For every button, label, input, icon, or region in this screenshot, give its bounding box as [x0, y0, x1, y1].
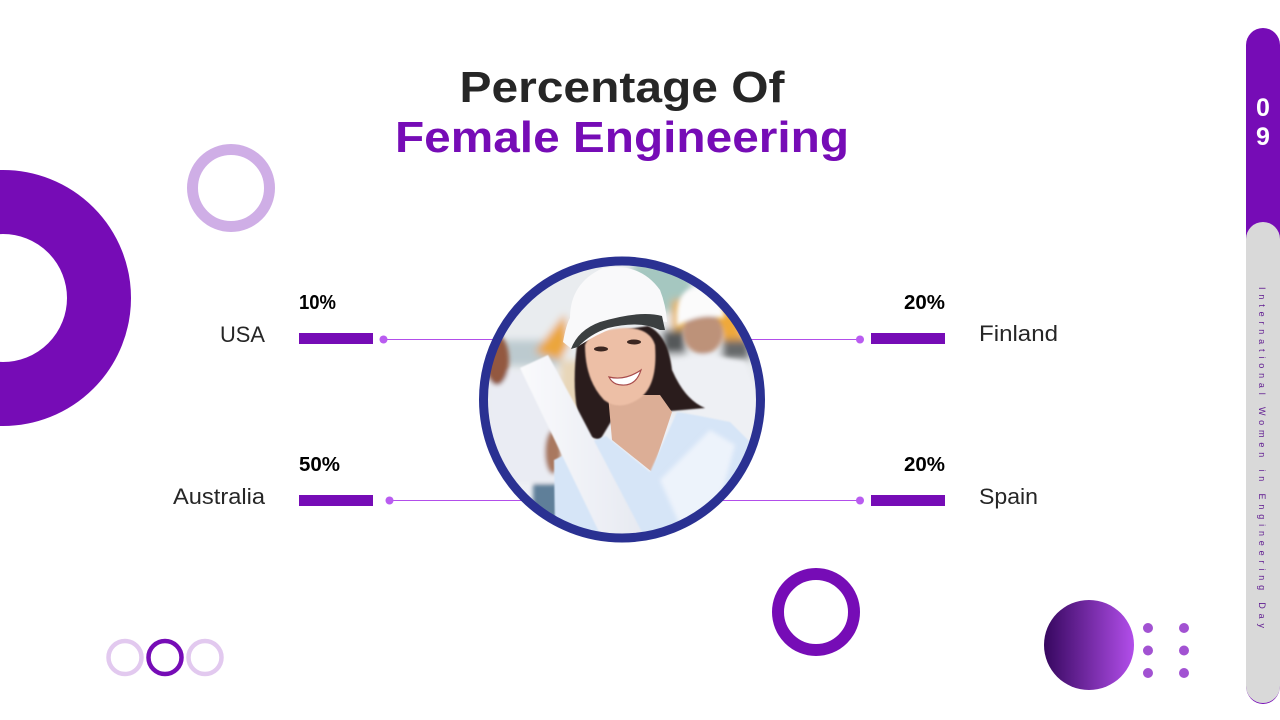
face — [585, 328, 655, 406]
hard hat — [563, 267, 667, 350]
stat: Australia 50% — [173, 454, 373, 509]
stat: USA 10% — [220, 292, 373, 347]
stat: Spain 20%: 20% — [904, 454, 945, 476]
paper roll — [520, 355, 643, 534]
stat: Spain 20%: Spain — [979, 484, 1038, 509]
background site — [502, 266, 752, 409]
hat band — [571, 314, 665, 349]
stat: USA 10%: USA — [220, 322, 265, 347]
side tab: page number: 0 — [1256, 94, 1270, 122]
stat: USA 10%: 10% — [299, 292, 336, 314]
decorative large donut — [0, 202, 99, 394]
side tab: event name: International Women in Engineering Day — [1257, 287, 1267, 629]
title — [395, 63, 849, 162]
person at left — [489, 336, 562, 516]
man in background — [674, 286, 746, 366]
title: Female Engineering — [395, 113, 849, 162]
stat: Spain 20% — [871, 454, 1038, 509]
shirt — [554, 412, 750, 540]
stat: Finland 20%: Finland — [979, 321, 1058, 346]
side tab: page number: 9 — [1256, 123, 1270, 151]
hair — [575, 326, 705, 440]
side tab: event name — [1246, 222, 1280, 704]
stat: Finland 20% — [871, 292, 1058, 346]
stat: Finland 20%: 20% — [904, 292, 945, 314]
small rings — [108, 641, 222, 674]
eyes and smile — [594, 340, 641, 385]
stat: Australia 50%: 50% — [299, 454, 340, 476]
title: Percentage Of — [460, 63, 785, 112]
connector lines — [380, 336, 864, 504]
stat: Australia 50%: Australia — [173, 484, 266, 509]
photo: woman engineer in hard hat — [480, 258, 770, 540]
decorative light ring — [192, 150, 270, 226]
dot grid — [1143, 623, 1189, 678]
photo ring — [484, 261, 760, 538]
gradient circle — [1044, 600, 1134, 690]
neck — [608, 395, 672, 472]
side tab: page number — [1246, 28, 1280, 240]
decorative purple ring — [778, 574, 854, 650]
